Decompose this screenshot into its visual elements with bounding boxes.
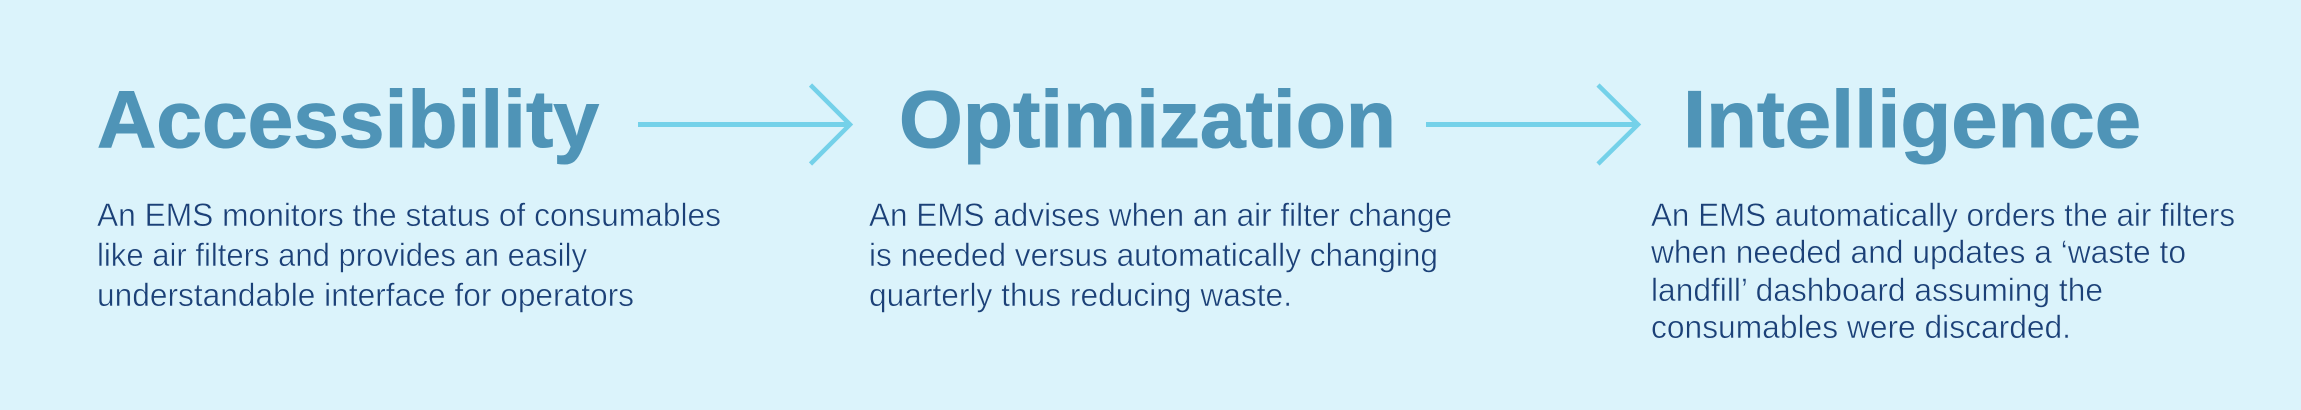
text block: accessibility description: [97, 197, 721, 313]
text block: intelligence description: [1650, 197, 2235, 345]
text block: accessibility description: like air filters and provides an easily: [97, 237, 587, 273]
arrow: optimization to intelligence: [1426, 85, 1638, 164]
text block: optimization description: An EMS advises when an air filter change: [869, 197, 1452, 233]
text block: intelligence description: consumables were discarded.: [1651, 309, 2071, 345]
panel: optimization: [869, 75, 1452, 313]
text block: accessibility description: An EMS monitors the status of consumables: [97, 197, 721, 233]
text block: optimization description: is needed versus automatically changing: [869, 237, 1438, 273]
text block: optimization description: [869, 197, 1452, 313]
text block: intelligence description: when needed and updates a ‘waste to: [1650, 234, 2186, 270]
heading: Accessibility: Accessibility: [97, 75, 599, 165]
text block: intelligence description: landfill’ dashboard assuming the: [1651, 272, 2103, 308]
text block: intelligence description: An EMS automatically orders the air filters: [1651, 197, 2235, 233]
text block: accessibility description: understandable interface for operators: [97, 277, 634, 313]
heading: Intelligence: Intelligence: [1683, 75, 2141, 165]
panel: intelligence: [1650, 75, 2235, 345]
panel: accessibility: [97, 75, 721, 313]
text block: optimization description: quarterly thus reducing waste.: [869, 277, 1292, 313]
heading: Optimization: Optimization: [899, 75, 1396, 165]
arrow: accessibility to optimization: [638, 85, 850, 164]
